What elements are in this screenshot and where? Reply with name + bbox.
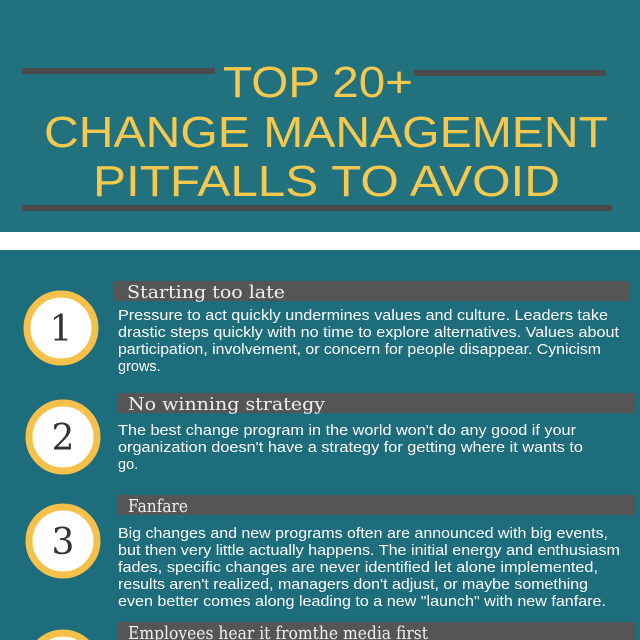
item 1: Starting too late (127, 282, 285, 303)
title (44, 58, 608, 206)
title: CHANGE MANAGEMENT (44, 108, 608, 157)
icon: number 3 circle: 3 (52, 522, 74, 563)
item 1: drastic steps quickly with no time to explore alternatives. Values about (118, 325, 619, 341)
item 3: Big changes and new programs often are announced with big events, (118, 526, 608, 542)
item 3 (29, 495, 635, 610)
icon: number 1 circle: 1 (50, 309, 72, 350)
icon: number 3 circle (29, 507, 97, 575)
icon: number 2 circle (29, 403, 97, 471)
item 2: go. (118, 457, 138, 473)
item 3: fades, specific changes are never identified let alone implemented, (118, 560, 598, 576)
item 1: grows. (118, 359, 161, 375)
item 4 (29, 622, 635, 640)
item 1: Pressure to act quickly undermines values and culture. Leaders take (118, 308, 608, 324)
item 2: The best change program in the world won't do any good if your (118, 423, 576, 439)
item 2: No winning strategy (128, 394, 326, 415)
item 3: Fanfare (128, 496, 188, 517)
title: TOP 20+ (223, 58, 413, 107)
item 3: but then very little actually happens. The initial energy and enthusiasm (118, 543, 620, 559)
icon: number 4 circle (29, 633, 97, 640)
icon: number 2 circle: 2 (52, 418, 74, 459)
item 1: participation, involvement, or concern for people disappear. Cynicism (118, 342, 601, 358)
item 1 (27, 281, 630, 375)
icon: number 1 circle (27, 294, 95, 362)
title: PITFALLS TO AVOID (93, 157, 560, 206)
item 3: even better comes along leading to a new "launch" with new fanfare. (118, 594, 606, 610)
item 3: results aren't realized, managers don't adjust, or maybe something (118, 577, 588, 593)
item 2 (29, 393, 635, 473)
item 2: organization doesn't have a strategy for getting where it wants to (118, 440, 583, 456)
